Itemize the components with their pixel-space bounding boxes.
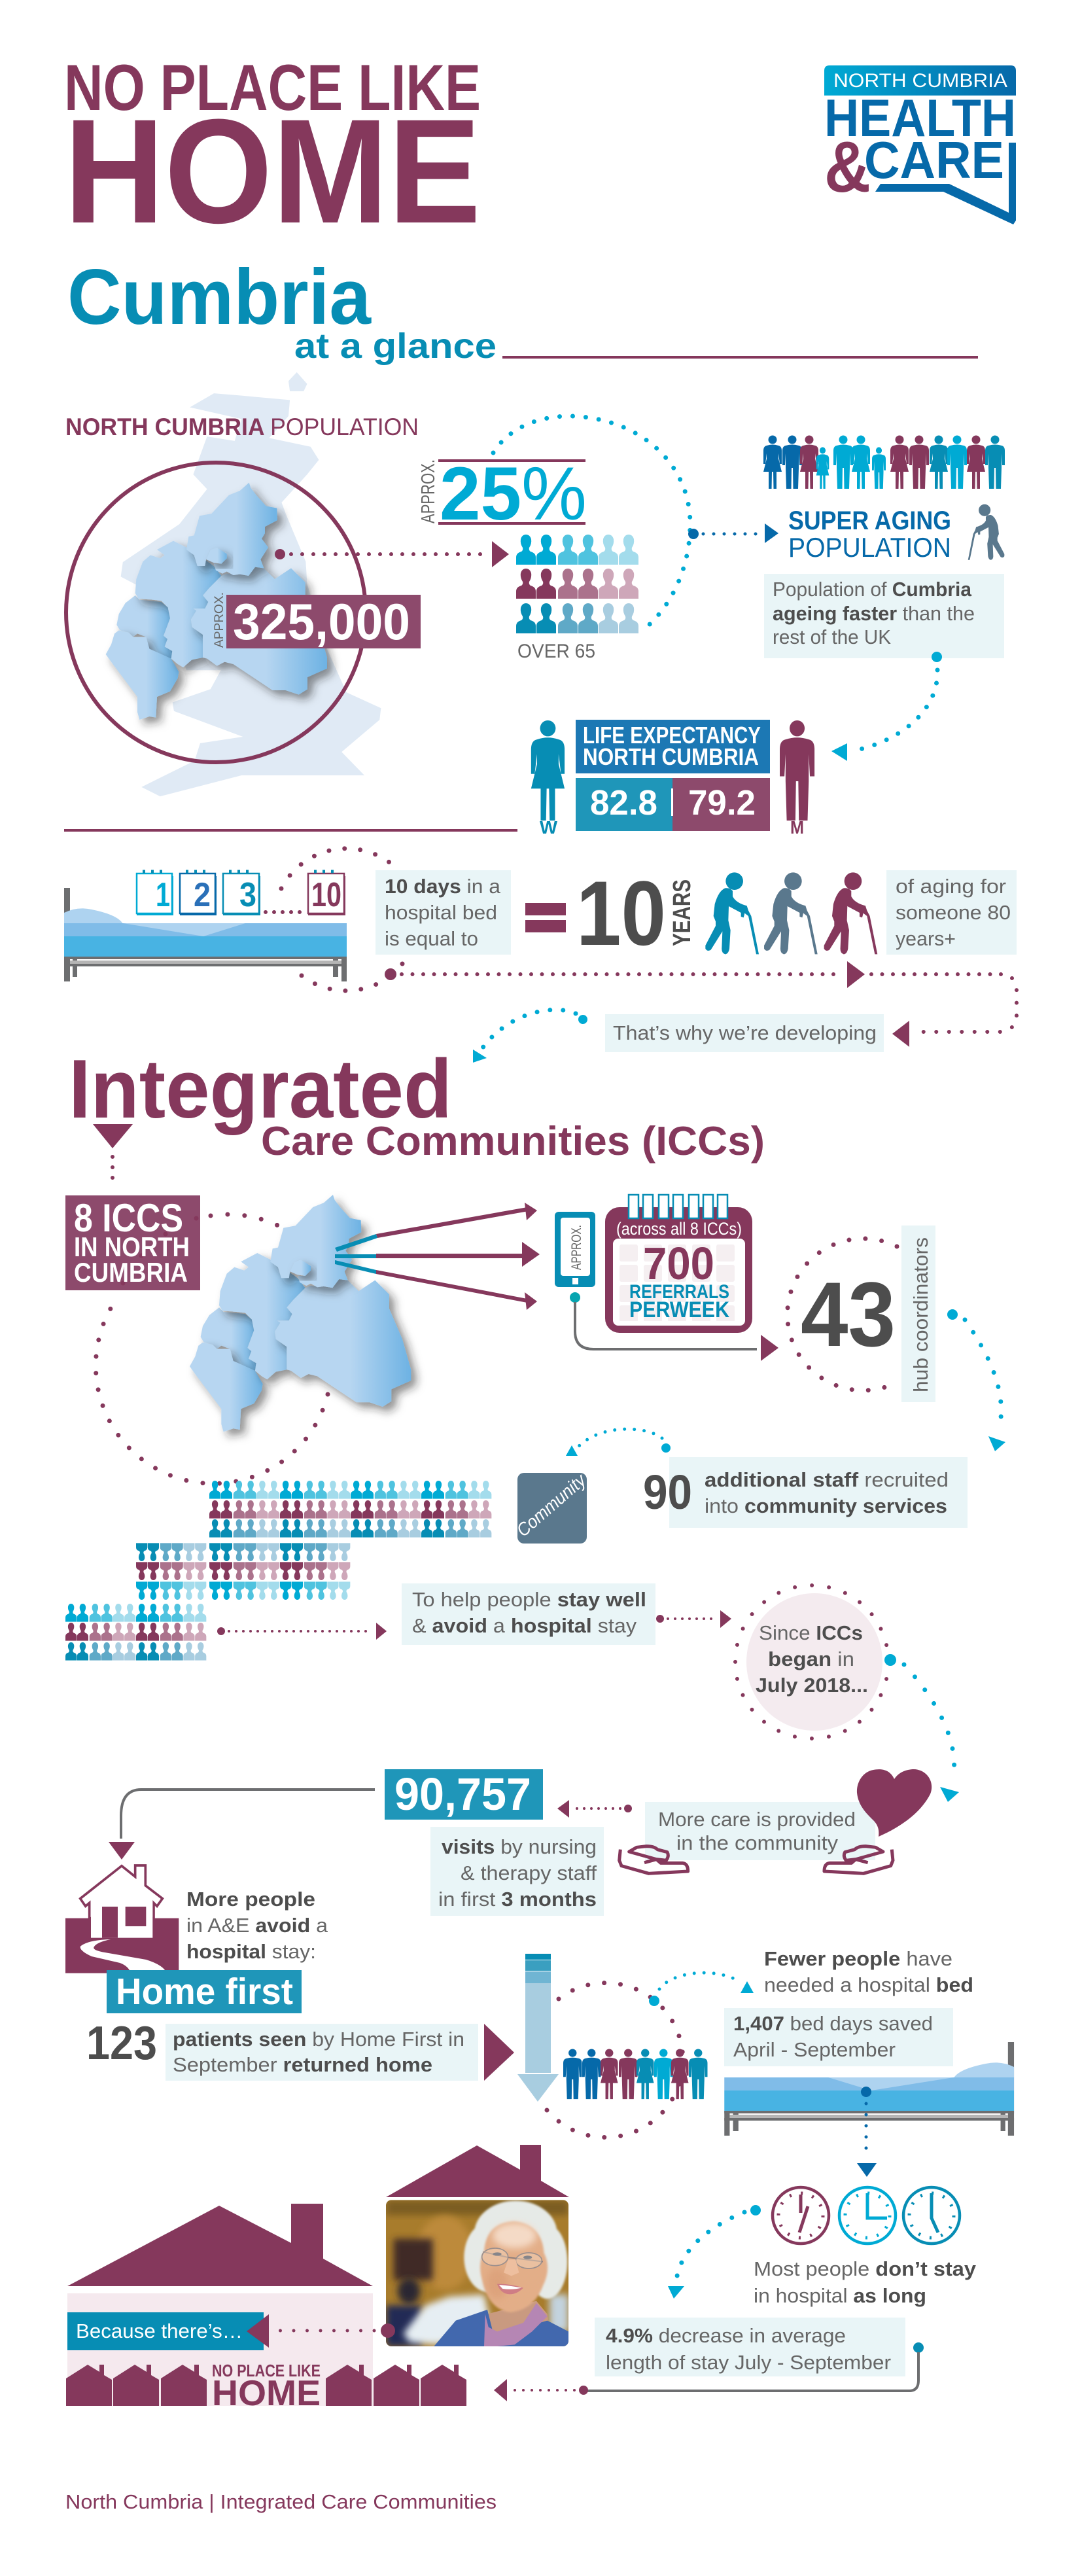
icon: man bbox=[780, 720, 814, 838]
panel: visits bbox=[430, 1827, 604, 1916]
stat: 43 hub coordinators bbox=[788, 1226, 935, 1402]
panel: 1,407 bed days: April - September bbox=[733, 2038, 896, 2061]
arrow: down to 8 iccs bbox=[93, 1124, 133, 1188]
panel: 123 patients: patients seen by Home First in bbox=[173, 2028, 464, 2051]
text: most people: Most people don’t stay bbox=[754, 2257, 977, 2280]
heading: cumbria at a glance: at a glance bbox=[294, 326, 497, 366]
icon: calendars 1 2 3 10 bbox=[137, 872, 345, 915]
icons: clocks bbox=[773, 2187, 960, 2244]
arrow: to life expectancy bbox=[831, 652, 942, 761]
label: because there's bbox=[67, 2312, 395, 2350]
arrow: since iccs to care bbox=[884, 1654, 959, 1802]
callout: since iccs began: July 2018... bbox=[756, 1674, 868, 1697]
stat: 8 iccs: CUMBRIA bbox=[74, 1257, 188, 1288]
icon: crowd of people bbox=[763, 436, 1005, 489]
panel: life expectancy: NORTH CUMBRIA bbox=[583, 743, 759, 770]
stat: 25 percent over 65: OVER 65 bbox=[517, 641, 595, 662]
connector: to fence bbox=[494, 2342, 924, 2401]
logo: small no place like home: NO PLACE LIKE bbox=[212, 2361, 321, 2380]
panel: life expectancy: 79.2 bbox=[688, 783, 756, 822]
equals 10 years: 10 bbox=[576, 862, 666, 964]
icon: heart bbox=[857, 1769, 932, 1837]
panel: that's why: That’s why we’re developing bbox=[613, 1021, 877, 1044]
label: because there's: Because there’s… bbox=[76, 2320, 243, 2342]
panel: 4.9% decrease bbox=[595, 2318, 905, 2376]
heading: north cumbria population: NORTH CUMBRIA POPULATION bbox=[65, 414, 419, 440]
stat: 325,000 population: APPROX. bbox=[213, 592, 226, 648]
callout: since iccs began: began in bbox=[768, 1648, 854, 1670]
arrow: to fewer people bbox=[649, 1973, 754, 2006]
stat: 25 percent over 65 bbox=[418, 452, 638, 662]
icon: down arrow gauge bbox=[517, 1954, 559, 2102]
arrow: people to stay well bbox=[217, 1623, 387, 1640]
stat: 43 hub coordinators: 43 bbox=[801, 1263, 896, 1366]
panel: 4.9% decrease: length of stay July - September bbox=[606, 2351, 891, 2374]
panel: 123 patients: 123 bbox=[86, 2017, 157, 2070]
dotted loop: around calendar bbox=[281, 849, 404, 991]
photo: smiling elderly woman bbox=[386, 2200, 568, 2347]
dotted ring: around people bbox=[547, 1983, 683, 2138]
house: small roof over photo bbox=[386, 2145, 569, 2197]
panel: of aging: someone 80 bbox=[896, 901, 1011, 924]
panel: 700 referrals calendar: (across all 8 ICCs) bbox=[616, 1219, 742, 1239]
stat: 8 iccs: 8 ICCS bbox=[74, 1196, 183, 1240]
logo: north cumbria health and care: NORTH CUMBRIA bbox=[833, 70, 1007, 92]
title: no place like home: HOME bbox=[64, 89, 481, 255]
icon: calendars 1 2 3 10: 3 bbox=[239, 876, 256, 914]
panel: ageing faster: rest of the UK bbox=[773, 626, 891, 648]
fence houses right bbox=[326, 2365, 466, 2406]
panel: life expectancy: LIFE EXPECTANCY bbox=[583, 722, 761, 749]
panel: 90 additional staff: into community services bbox=[705, 1494, 947, 1517]
text: more people in a&e: More people bbox=[186, 1888, 315, 1911]
icon: caring hands bbox=[620, 1846, 893, 1873]
icon: man: M bbox=[790, 817, 804, 838]
text: more people in a&e: in A&E avoid a bbox=[186, 1914, 328, 1937]
arrow: to 90,757 bbox=[557, 1800, 632, 1818]
people block: top bbox=[209, 1481, 491, 1538]
fence houses left bbox=[66, 2365, 207, 2406]
panel: 10 days in a hospital bed: 10 days in a bbox=[385, 875, 501, 898]
text: fewer people: Fewer people have bbox=[764, 1947, 952, 1970]
text: most people: in hospital as long bbox=[754, 2284, 926, 2307]
map: uk background bbox=[121, 372, 381, 796]
logo: north cumbria health and care: & bbox=[824, 127, 871, 207]
text: more people in a&e bbox=[186, 1888, 328, 1963]
people block: lower bbox=[65, 1604, 206, 1661]
panel: 700 referrals calendar: REFERRALS bbox=[629, 1281, 729, 1303]
arrows: map to referrals bbox=[335, 1203, 540, 1310]
panel: 123 patients bbox=[86, 2017, 514, 2081]
arrow: bed to clocks bbox=[857, 2087, 877, 2177]
clock three bbox=[903, 2187, 960, 2244]
equals 10 years bbox=[525, 862, 696, 964]
icon: woman bbox=[531, 720, 565, 838]
panel: ageing faster bbox=[764, 574, 1004, 658]
panel: 700 referrals calendar: PERWEEK bbox=[629, 1297, 729, 1322]
logo: north cumbria health and care: CARE bbox=[864, 131, 1004, 189]
panel: 10 days in a hospital bed: is equal to bbox=[385, 927, 478, 950]
panel: 123 patients: September returned home bbox=[173, 2053, 432, 2076]
panel: 700 referrals calendar bbox=[605, 1195, 752, 1333]
heading: super aging population bbox=[788, 504, 1004, 563]
heading: integrated care communities: Care Communities (ICCs) bbox=[261, 1119, 765, 1164]
arrow: to integrated bbox=[473, 1010, 587, 1063]
stat: 8 iccs: IN NORTH bbox=[74, 1231, 190, 1262]
icon: calendars 1 2 3 10: 2 bbox=[194, 876, 211, 914]
icon: second hospital bed bbox=[724, 2042, 1014, 2136]
heading: integrated care communities bbox=[69, 1042, 765, 1164]
title: no place like home: NO PLACE LIKE bbox=[64, 51, 481, 124]
panel: more care in the community: in the community bbox=[676, 1831, 839, 1854]
arrow: 43 down to 90 bbox=[947, 1309, 1005, 1451]
callout: since iccs began bbox=[735, 1585, 888, 1738]
text: most people bbox=[754, 2257, 977, 2307]
stat: 43 hub coordinators: hub coordinators bbox=[909, 1237, 932, 1392]
people block: inverted middle bbox=[136, 1543, 350, 1600]
clock two bbox=[839, 2187, 896, 2244]
icon: phone bbox=[555, 1212, 595, 1287]
dotted connector to developing bbox=[385, 961, 1017, 1047]
arrow: clocks to stay bbox=[668, 2205, 761, 2299]
panel: stay well: & avoid a hospital stay bbox=[412, 1614, 637, 1637]
panel: 4.9% decrease: 4.9% decrease in average bbox=[606, 2324, 846, 2347]
equals 10 years: YEARS bbox=[669, 879, 696, 946]
heading: super aging population: POPULATION bbox=[788, 532, 951, 563]
connector: phone to 43 bbox=[570, 1292, 778, 1361]
icon: row of people bbox=[563, 2049, 708, 2099]
panel: life expectancy: 82.8 bbox=[590, 783, 657, 822]
panel: visits: visits by nursing bbox=[442, 1835, 597, 1858]
panel: 10 days in a hospital bed: hospital bed bbox=[385, 901, 497, 924]
panel: of aging: of aging for bbox=[896, 875, 1006, 898]
stat: 90,757: 90,757 bbox=[394, 1769, 531, 1820]
stat: 8 iccs bbox=[65, 1195, 200, 1290]
population circle bbox=[66, 463, 366, 762]
heading: integrated care communities: Integrated bbox=[69, 1042, 452, 1135]
panel: life expectancy bbox=[576, 720, 770, 831]
clock one bbox=[773, 2187, 829, 2244]
panel: of aging: years+ bbox=[896, 927, 956, 950]
text: more people in a&e: hospital stay: bbox=[186, 1940, 316, 1963]
heading: cumbria at a glance bbox=[67, 253, 978, 366]
map: icc districts bbox=[190, 1195, 411, 1432]
icon: calendars 1 2 3 10: 1 bbox=[156, 876, 170, 914]
panel: that's why bbox=[605, 1014, 884, 1052]
panel: more care in the community: More care is provided bbox=[658, 1808, 856, 1831]
panel: 90 additional staff bbox=[643, 1457, 968, 1528]
panel: 90 additional staff: 90 bbox=[643, 1465, 692, 1519]
heading: cumbria at a glance: Cumbria bbox=[67, 253, 372, 341]
logo: north cumbria health and care: HEALTH bbox=[824, 89, 1016, 148]
panel: 1,407 bed days bbox=[724, 2008, 953, 2066]
heading: super aging population: SUPER AGING bbox=[788, 506, 951, 535]
stat: 325,000 population: 325,000 bbox=[233, 593, 410, 650]
panel: 700 referrals calendar: 700 bbox=[643, 1238, 714, 1289]
text: fewer people bbox=[764, 1947, 973, 1996]
stat: 25 percent over 65: APPROX. bbox=[418, 459, 439, 523]
panel: more care in the community bbox=[645, 1802, 875, 1860]
icon: woman: W bbox=[540, 817, 558, 838]
icon: hospital bed bbox=[64, 888, 347, 981]
connector: 90,757 to home bbox=[109, 1790, 375, 1860]
text: fewer people: needed a hospital bed bbox=[764, 1973, 973, 1996]
badge: home first: Home first bbox=[116, 1971, 293, 2013]
callout: since iccs began: Since ICCs bbox=[759, 1621, 863, 1644]
house: large with because there's bbox=[67, 2204, 373, 2406]
icon: community badge: Community bbox=[513, 1469, 591, 1541]
icon: home with road bbox=[65, 1865, 179, 1973]
dotted arc: around 25 percent bbox=[493, 416, 690, 626]
arrow: 90 to community bbox=[566, 1429, 671, 1456]
panel: visits: & therapy staff bbox=[461, 1861, 597, 1884]
icons: elderly walkers bbox=[705, 872, 877, 954]
map: north cumbria districts bbox=[106, 483, 327, 720]
panel: stay well: To help people stay well bbox=[412, 1588, 646, 1611]
panel: stay well bbox=[402, 1583, 655, 1645]
footer: North Cumbria | Integrated Care Communities bbox=[65, 2490, 497, 2513]
panel: of aging bbox=[886, 870, 1017, 955]
panel: ageing faster: ageing faster than the bbox=[773, 602, 975, 625]
stat: 25 percent over 65: 25% bbox=[440, 452, 587, 536]
arrow: map to 25 percent bbox=[275, 541, 509, 567]
icon: phone: APPROX. bbox=[569, 1225, 584, 1270]
logo: small no place like home: HOME bbox=[212, 2373, 321, 2413]
panel: visits: in first 3 months bbox=[438, 1888, 597, 1911]
dotted ring around icc map bbox=[96, 1214, 328, 1483]
arrow: to since iccs bbox=[656, 1610, 731, 1628]
logo: north cumbria health and care bbox=[824, 65, 1016, 224]
panel: 10 days in a hospital bed bbox=[375, 870, 511, 955]
panel: 90 additional staff: additional staff recruited bbox=[705, 1468, 949, 1491]
arrow: to super aging bbox=[688, 523, 778, 543]
icon: calendars 1 2 3 10: 10 bbox=[311, 876, 341, 914]
panel: 1,407 bed days: 1,407 bed days saved bbox=[733, 2012, 933, 2035]
panel: ageing faster: Population of Cumbria bbox=[773, 578, 972, 601]
